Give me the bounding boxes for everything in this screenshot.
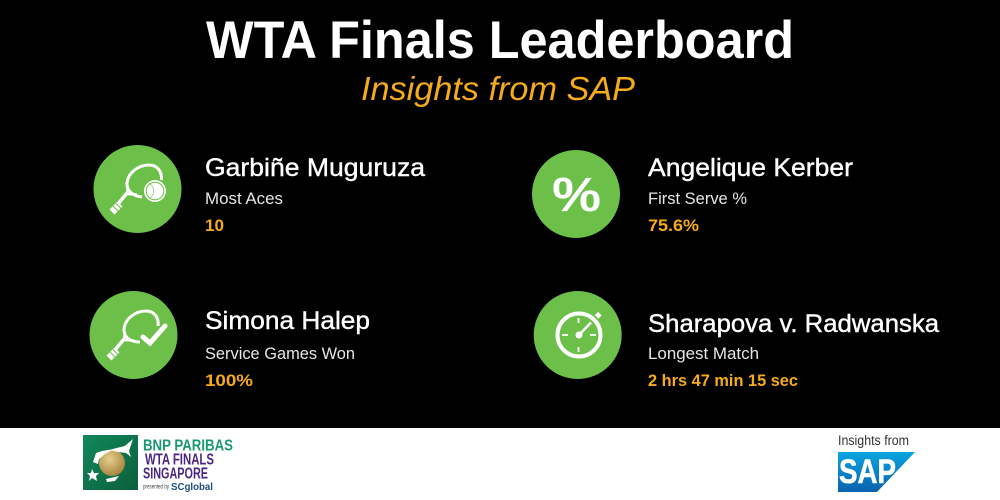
entry: longest match	[534, 291, 939, 390]
stat value: 2 hrs 47 min 15 sec	[648, 372, 798, 390]
entry: Halep service games	[90, 291, 370, 390]
stat value: 75.6%	[648, 217, 699, 235]
subtitle: Insights from SAP	[361, 70, 635, 107]
logo wording: SCglobal	[171, 482, 213, 493]
logo wording: presented by	[143, 484, 169, 490]
logo wording: BNP PARIBAS	[143, 438, 233, 454]
stat label: Most Aces	[205, 190, 283, 208]
stat value: 10	[205, 217, 224, 235]
logo caption: Insights from	[838, 433, 909, 448]
logo wording	[143, 438, 233, 493]
entry: Kerber first serve	[532, 150, 853, 238]
player name: Angelique Kerber	[648, 154, 853, 182]
icon: racket and ball	[94, 145, 182, 233]
player name: Garbiñe Muguruza	[205, 154, 425, 182]
match title: Sharapova v. Radwanska	[648, 310, 939, 338]
stat value: 100%	[205, 372, 253, 390]
logo: BNP Paribas WTA Finals Singapore	[83, 435, 233, 493]
player name: Simona Halep	[205, 307, 370, 335]
footer band	[0, 428, 1000, 500]
entry: Muguruza most aces	[94, 145, 425, 235]
logo wording: WTA FINALS	[145, 452, 214, 468]
SAP mark: SAP	[839, 453, 896, 491]
icon: percent: %	[552, 169, 601, 222]
stat label: Longest Match	[648, 345, 759, 363]
icon: percent	[532, 150, 620, 238]
logo emblem	[83, 435, 138, 490]
icon: racket and check	[90, 291, 178, 379]
logo wording: SINGAPORE	[143, 466, 208, 482]
title: WTA Finals Leaderboard	[206, 11, 794, 70]
stat label: First Serve %	[648, 190, 747, 208]
stat label: Service Games Won	[205, 345, 355, 363]
icon: stopwatch	[534, 291, 622, 379]
logo: Insights from SAP	[838, 433, 915, 492]
